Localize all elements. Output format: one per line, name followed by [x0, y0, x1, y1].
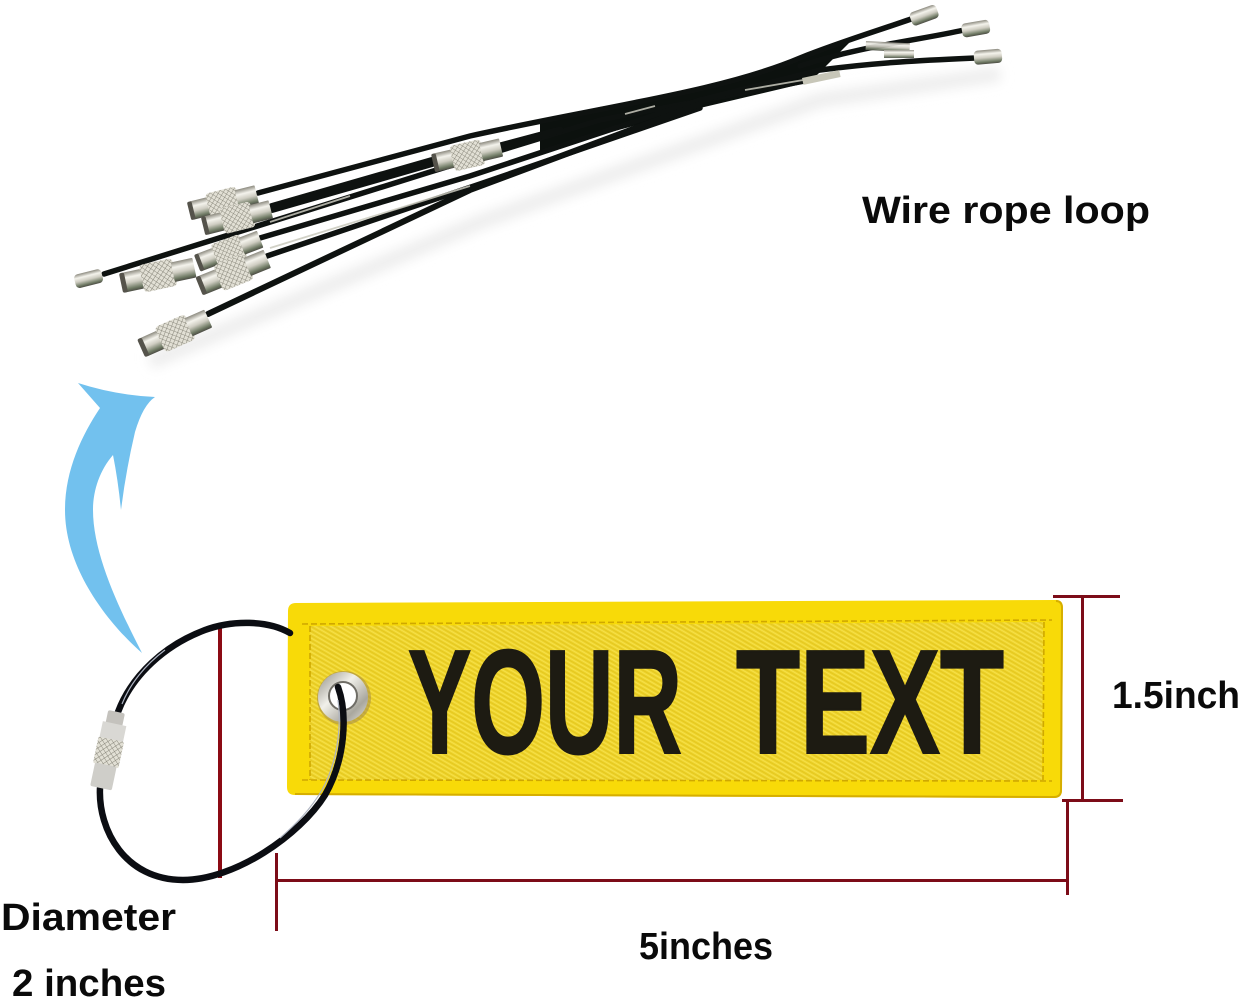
ferrule: top right middle pair: [866, 41, 914, 58]
clasp: bottom: [136, 306, 214, 361]
tag border shading: [295, 601, 1062, 797]
label: 1.5inch: 1.5inch: [1112, 675, 1240, 717]
ring clasp: [88, 709, 130, 791]
ferrule: far left: [73, 268, 104, 289]
dimension line: ring diameter: [218, 626, 222, 878]
clasp: upper pair second: [200, 197, 274, 239]
ferrule: top right third: [973, 49, 1003, 65]
clasp: middle right lower: [194, 246, 272, 299]
dimension line: 5 inches width: [275, 800, 1069, 931]
ferrule: top right first: [909, 4, 940, 27]
clasp: upper pair: [186, 182, 260, 224]
panel: wire rope loops bundle: [73, 4, 1003, 362]
black wires band where the wires converge: [540, 42, 850, 152]
ferrule: light end: [802, 70, 841, 85]
wire highlights: [270, 78, 815, 248]
clasp: middle left: [118, 254, 197, 297]
label: 5inches: 5inches: [639, 926, 773, 968]
ring wire: [100, 623, 344, 880]
tag stitching: [302, 620, 1052, 781]
clasp: middle right upper: [193, 227, 265, 275]
tag woven centre: [310, 622, 1043, 780]
panel: yellow embroidered key tag: [287, 600, 1063, 798]
embroidered text: YOUR: YOUR: [408, 620, 682, 785]
ferrule: top right second: [961, 19, 991, 38]
label: Diameter: Diameter: [1, 897, 176, 939]
panel: black wire ring: [88, 623, 344, 880]
arrow: blue curved arrow: [65, 383, 155, 653]
embroidered text: TEXT: TEXT: [736, 620, 1004, 785]
clasp: center of bundle: [430, 135, 504, 176]
heading: wire rope loop: Wire rope loop: [862, 190, 1150, 232]
dimension line: 1.5 inch height: [1053, 595, 1123, 802]
black wires: [104, 18, 975, 314]
tag border: [287, 600, 1063, 798]
soft shadow under bundle: [150, 74, 1000, 362]
metal grommet: [317, 671, 371, 725]
ring highlight: [122, 650, 339, 838]
